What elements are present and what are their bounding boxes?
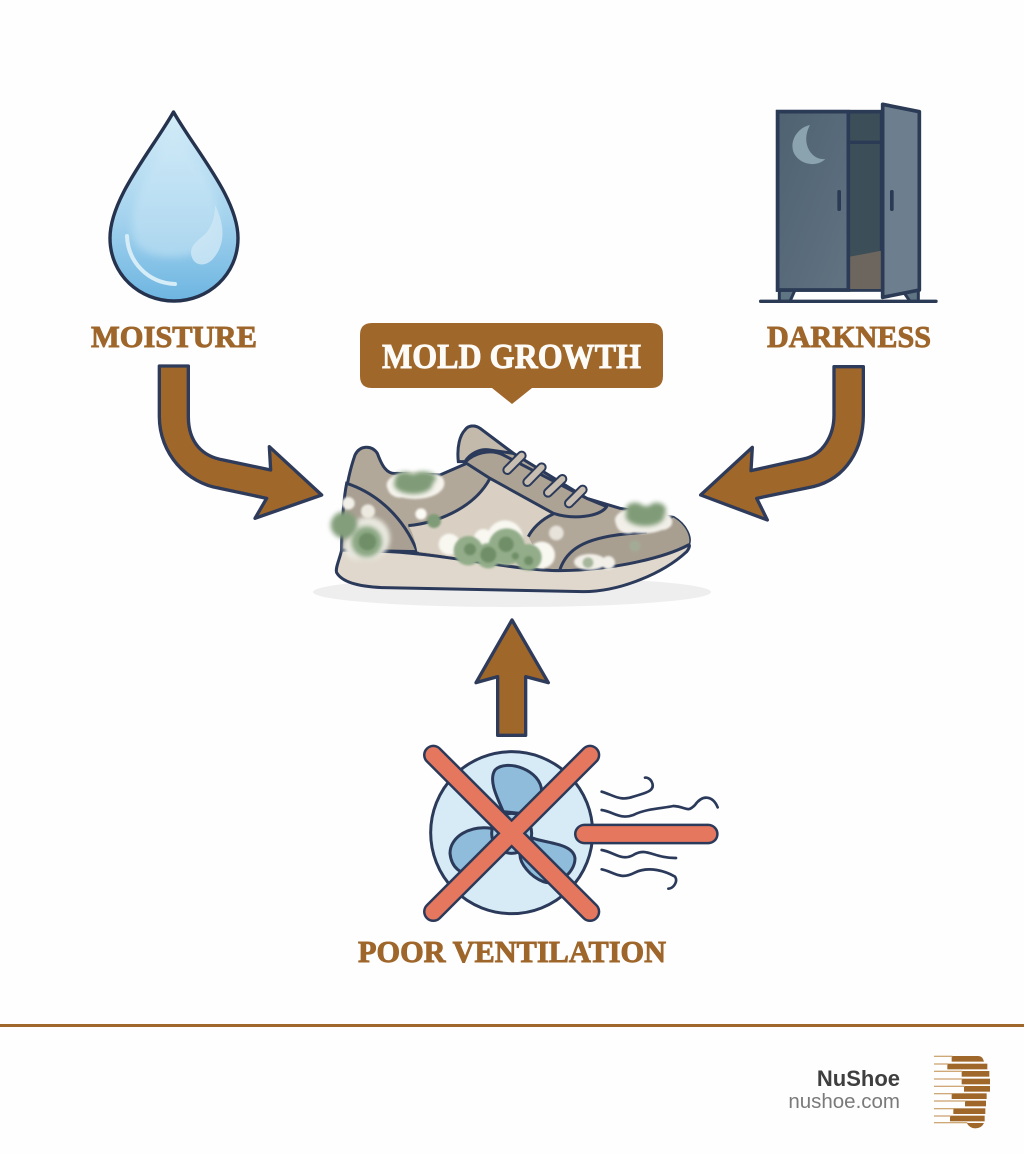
mold spots: toe — [549, 526, 564, 540]
mold patch: collar — [387, 471, 444, 499]
arrow: ventilation to shoe — [476, 620, 548, 735]
footer divider — [0, 1024, 1024, 1027]
logo: striped foot — [934, 1056, 990, 1128]
laces — [507, 456, 583, 503]
arrow: moisture to shoe — [159, 366, 322, 518]
footer brand: nushoe.com — [788, 1090, 900, 1113]
footer brand: NuShoe — [817, 1066, 900, 1091]
mold patch: heel — [331, 497, 390, 560]
arrow: darkness to shoe — [701, 367, 863, 520]
callout: mold growth: MOLD GROWTH — [382, 337, 641, 376]
air waves — [602, 778, 718, 889]
icon: blocked fan — [431, 752, 718, 914]
callout: mold growth — [360, 323, 663, 404]
mold patch: midfoot — [439, 520, 555, 571]
label: darkness: DARKNESS — [767, 319, 931, 354]
cross-out bars — [433, 755, 590, 912]
mold spots: middle — [415, 508, 427, 520]
mold patch: toe — [615, 503, 672, 534]
sole — [336, 545, 689, 592]
label: moisture: MOISTURE — [91, 319, 257, 354]
icon: dark closet — [761, 104, 936, 301]
shoe shadow — [313, 577, 711, 607]
label: poor ventilation: POOR VENTILATION — [358, 934, 666, 969]
footer brand — [788, 1066, 900, 1113]
icon: moldy sneaker — [331, 426, 689, 592]
icon: water drop — [110, 112, 238, 301]
